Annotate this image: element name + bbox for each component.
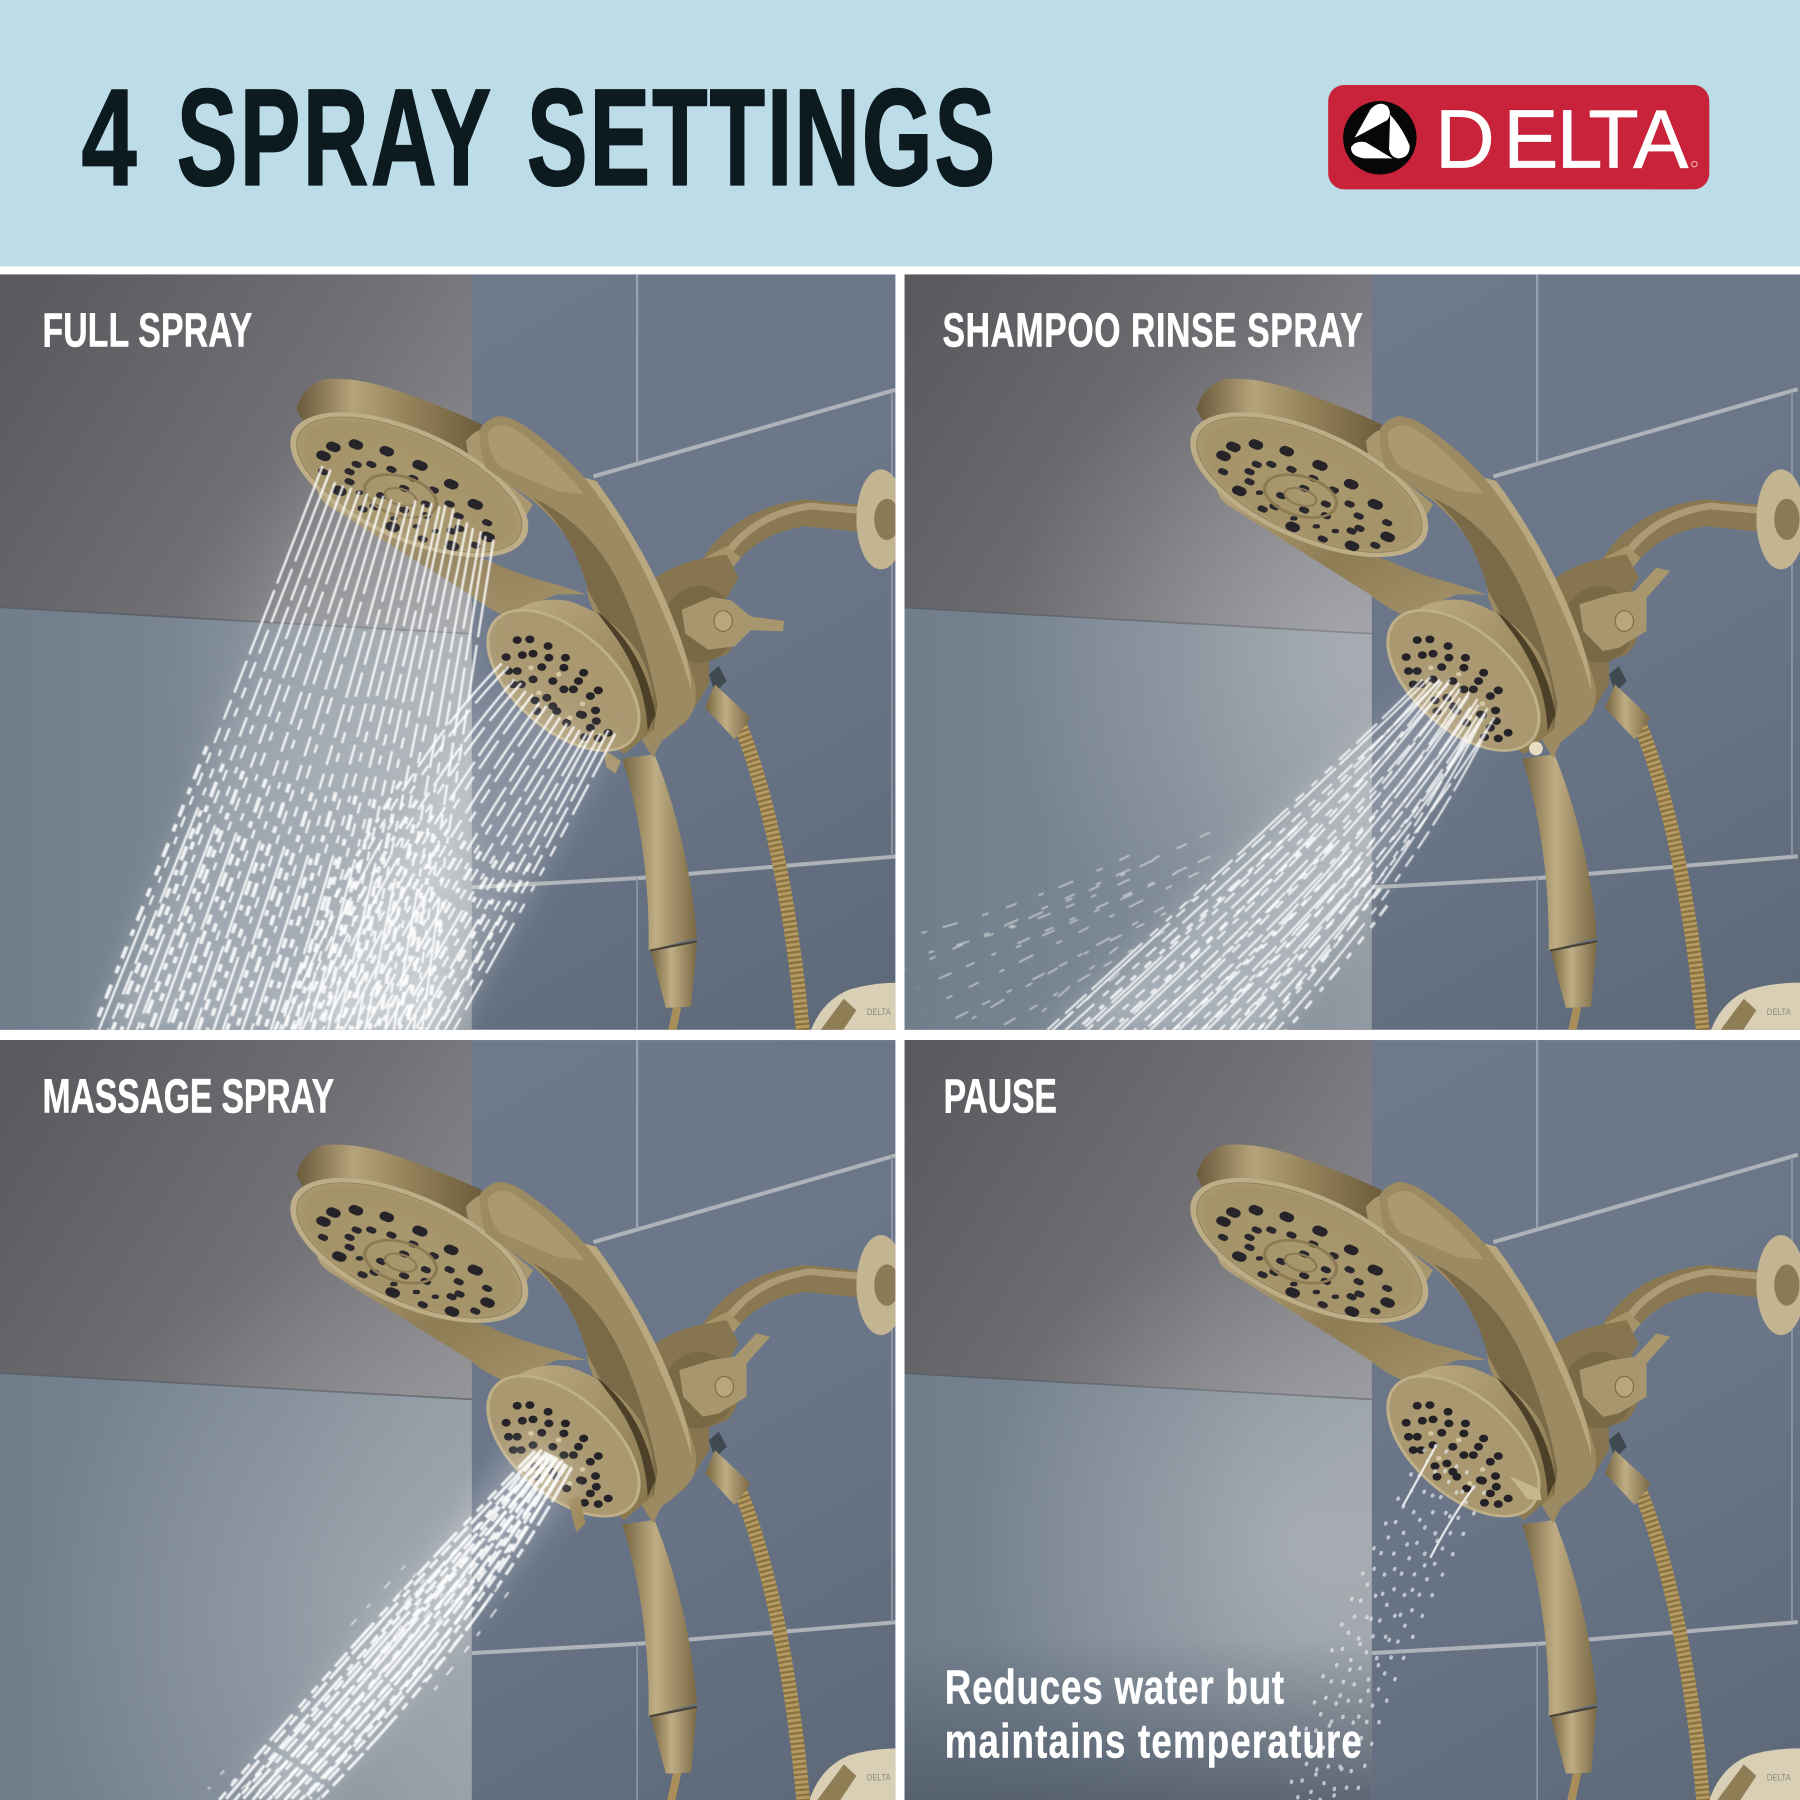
title: SETTINGS: [527, 60, 995, 214]
panel: pause: [900, 1040, 1800, 1800]
panel: full spray: [0, 274, 907, 1043]
panel: massage spray: [0, 1040, 907, 1800]
label: shampoo rinse spray: SHAMPOO RINSE SPRAY: [942, 303, 1363, 357]
label: pause: PAUSE: [944, 1068, 1057, 1123]
panel scene: wall, fixture and water: [0, 1040, 907, 1800]
panel scene: wall, fixture and water: [0, 274, 907, 1043]
title: 4: [82, 61, 137, 215]
pause description: maintains temperature: [945, 1715, 1362, 1769]
header band: [0, 0, 1800, 266]
pause description: Reduces water but: [945, 1661, 1284, 1715]
label: full spray: FULL SPRAY: [42, 303, 252, 357]
title: SPRAY: [177, 60, 491, 214]
title: [82, 60, 995, 215]
label: massage spray: MASSAGE SPRAY: [42, 1068, 334, 1123]
pause description: [945, 1661, 1362, 1769]
panel scene: wall, fixture and water: [900, 1040, 1800, 1800]
Delta logo: DELTA: [1435, 93, 1688, 186]
panel: shampoo rinse spray: [900, 274, 1800, 1046]
Delta logo: [1328, 85, 1709, 189]
panel scene: wall, fixture and water: [900, 274, 1800, 1046]
